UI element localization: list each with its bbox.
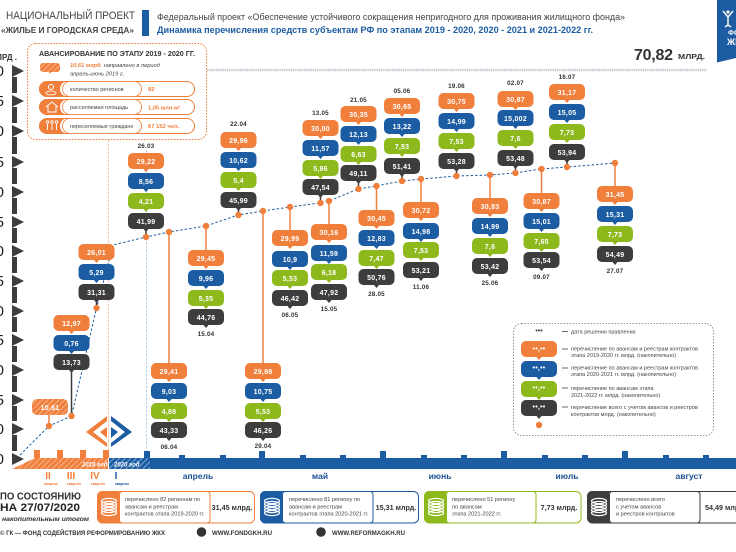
callout: 06.05: 5,53 bbox=[283, 276, 297, 283]
callout: 11.06: 11.06 bbox=[413, 284, 429, 291]
panel: advance callout: апрель-июнь 2019 г. bbox=[70, 72, 124, 78]
callout: 06.05: 06.05 bbox=[282, 312, 299, 319]
trend line bbox=[20, 163, 615, 455]
callout: 22.04: 29,96 bbox=[229, 138, 248, 145]
callout: 19.06 bbox=[438, 83, 474, 179]
legend: дата решения правления bbox=[571, 330, 636, 336]
callout: 27.07: 54,49 bbox=[606, 252, 624, 259]
callout: 25.06: 7,6 bbox=[485, 244, 495, 251]
callout: 12,97: 12,97 bbox=[62, 321, 81, 328]
card: stage 2021-2022 bbox=[424, 491, 581, 523]
callout: 29.04: 5,53 bbox=[256, 409, 270, 416]
legend: ••,•• bbox=[532, 346, 546, 353]
callout: 16.07 bbox=[549, 74, 585, 170]
footer: © ГК — ФОНД СОДЕЙСТВИЯ РЕФОРМИРОВАНИЮ ЖКХ bbox=[0, 529, 165, 537]
callout: 22.04: 22.04 bbox=[230, 121, 247, 128]
callout: 26.03 bbox=[128, 143, 164, 240]
legend: 2021-2022 гг. млрд. (накопительно) bbox=[571, 393, 660, 399]
status date block: накопительным итогом bbox=[2, 516, 89, 523]
callout: 09.07: 15,01 bbox=[532, 219, 551, 226]
callout: 21.05: 6,63 bbox=[351, 152, 366, 159]
quarter labels: I bbox=[115, 471, 118, 482]
quarter labels: квартал bbox=[67, 482, 82, 486]
callout: 02.07: 7,6 bbox=[510, 136, 521, 143]
callout: 06.04: 9,03 bbox=[162, 389, 176, 396]
month labels bbox=[183, 471, 702, 481]
month labels: июль bbox=[556, 471, 578, 481]
callout: 28.05 bbox=[358, 183, 394, 298]
card: stage 2019-2020: контрактов этапа 2019-2020 гг. bbox=[125, 512, 205, 518]
callout: 06.05: 10,9 bbox=[283, 257, 297, 264]
card: stage 2019-2020 bbox=[97, 491, 254, 523]
callout: 19.06: 7,53 bbox=[449, 139, 464, 146]
callout: 09.07: 53,54 bbox=[532, 258, 551, 265]
legend: этапа 2020-2021 гг. млрд. (накопительно) bbox=[571, 372, 676, 378]
callout: 26,01: 31,31 bbox=[87, 290, 106, 297]
callout: 15.05: 6,18 bbox=[322, 270, 336, 277]
status date block: ПО СОСТОЯНИЮ bbox=[0, 490, 81, 502]
callout: 16.07: 16.07 bbox=[559, 74, 576, 81]
legend: ••,•• bbox=[532, 365, 546, 372]
callout: 28.05: 28.05 bbox=[368, 291, 385, 298]
callout: 06.04: 06.04 bbox=[161, 444, 178, 451]
callout: 26.03: 29,22 bbox=[137, 159, 155, 166]
card: stage 2020-2021: 15,31 млрд. bbox=[376, 503, 416, 512]
callout: 22.04: 5,4 bbox=[233, 178, 244, 185]
card: stage 2019-2020: авансам и реестрам bbox=[125, 504, 178, 510]
quarter labels: квартал bbox=[115, 482, 130, 486]
callout: 28.05: 30,45 bbox=[367, 216, 386, 223]
callout: 25.06: 53,42 bbox=[481, 264, 499, 271]
callout: 02.07 bbox=[498, 80, 534, 176]
callout: 15.04 bbox=[188, 223, 224, 338]
callout: 02.07: 15,002 bbox=[504, 116, 527, 123]
callout: 12,97: 0,76 bbox=[64, 341, 79, 348]
heading: federal project: Федеральный проект «Обеспечение устойчивого сокращения непригодного для проживания жилищного фонда» bbox=[157, 12, 625, 22]
callout: 15.04: 15.04 bbox=[198, 331, 215, 338]
callout: 11.06: 7,53 bbox=[414, 248, 428, 255]
callout: 06.04: 4,89 bbox=[162, 409, 176, 416]
callout: 26.03: 41,99 bbox=[137, 219, 155, 226]
quarter labels: квартал bbox=[91, 482, 106, 486]
footer bbox=[0, 527, 405, 537]
callout: 05.06 bbox=[384, 88, 420, 184]
title: national project: НАЦИОНАЛЬНЫЙ ПРОЕКТ bbox=[6, 9, 135, 22]
callout: 11.06 bbox=[403, 176, 439, 291]
callout: 29.04: 10,75 bbox=[254, 389, 272, 396]
header accent bar bbox=[142, 10, 149, 36]
logo: chevrons bbox=[86, 416, 132, 447]
callout: 05.06: 30,65 bbox=[393, 104, 411, 111]
card: stage 2019-2020: 31,45 млрд. bbox=[212, 503, 252, 512]
callout: 19.06: 30,75 bbox=[447, 99, 466, 106]
callout: 26.03: 4,21 bbox=[139, 199, 153, 206]
row: regions bbox=[39, 81, 194, 97]
total amount: 70,82 bbox=[634, 47, 673, 64]
callout: 26,01 bbox=[78, 244, 114, 311]
callout: 06.04: 43,33 bbox=[160, 428, 178, 435]
legend: перечисление по авансам и реестрам контрактов bbox=[571, 346, 698, 352]
card: stage 2021-2022: 7,73 млрд. bbox=[541, 503, 577, 512]
panel: advance callout bbox=[28, 44, 206, 140]
legend: этапа 2019-2020 гг. млрд. (накопительно) bbox=[571, 353, 676, 359]
callout: 25.06: 25.06 bbox=[482, 280, 499, 287]
callout: 29.04 bbox=[245, 208, 281, 450]
callout: 02.07: 30,87 bbox=[506, 97, 525, 104]
card: stage 2020-2021: перечислено 81 региону по bbox=[289, 497, 360, 503]
card: total: с учетом авансов bbox=[616, 504, 661, 510]
quarter labels: III bbox=[67, 471, 75, 482]
callout: 26,01: 5,29 bbox=[89, 270, 104, 277]
row: regions: 82 bbox=[148, 87, 154, 93]
quarter labels: II bbox=[45, 471, 51, 482]
callout: 13.05: 11,57 bbox=[311, 146, 330, 153]
callout: 26.03: 8,56 bbox=[139, 179, 153, 186]
callout: 15.04: 29,45 bbox=[197, 256, 215, 263]
callout: 05.06: 7,53 bbox=[395, 144, 409, 151]
callout: 13.05 bbox=[302, 110, 338, 206]
callout: 15.04: 44,76 bbox=[197, 315, 215, 322]
total amount bbox=[634, 47, 705, 64]
quarter labels bbox=[44, 471, 130, 486]
row: regions: количество регионов bbox=[70, 87, 124, 93]
callout: 25.06 bbox=[472, 172, 508, 287]
callout: 27.07: 27.07 bbox=[607, 268, 624, 275]
month labels: август bbox=[676, 471, 702, 481]
callout: 06.04 bbox=[151, 229, 187, 451]
title: national project bbox=[1, 9, 135, 35]
callout: 05.06: 13,22 bbox=[393, 124, 411, 131]
callout: 29.04: 46,26 bbox=[254, 428, 272, 435]
legend: ••,•• bbox=[532, 404, 546, 411]
card: total: и реестров контрактов bbox=[616, 512, 675, 518]
callout: 26.03: 26.03 bbox=[138, 143, 155, 150]
callout: 10,61 bbox=[32, 399, 68, 429]
card: stage 2020-2021 bbox=[260, 491, 418, 523]
callout: 25.06: 30,83 bbox=[481, 204, 499, 211]
callout: 21.05: 49,11 bbox=[349, 171, 368, 178]
callout: 28.05: 12,83 bbox=[367, 236, 386, 243]
status date block: НА 27/07/2020 bbox=[0, 502, 80, 514]
callout: 19.06: 14,99 bbox=[447, 119, 466, 126]
callout: 06.04: 29,41 bbox=[160, 369, 178, 376]
month labels: июнь bbox=[429, 471, 451, 481]
callout: 15.05: 47,92 bbox=[320, 290, 338, 297]
callout: 09.07: 09.07 bbox=[533, 274, 550, 281]
card: stage 2021-2022: этапа 2021-2022 гг. bbox=[452, 512, 502, 518]
callout: 05.06: 51,41 bbox=[393, 164, 411, 171]
heading: chart subtitle: Динамика перечисления средств субъектам РФ по этапам 2019 - 2020, 2020 - 2021 и 2021-2022 гг. bbox=[157, 25, 593, 36]
legend bbox=[514, 324, 714, 436]
callout: 19.06: 53,28 bbox=[447, 159, 466, 166]
footer: WWW.REFORMAGKH.RU bbox=[332, 530, 405, 537]
callout: 21.05: 12,13 bbox=[349, 132, 368, 139]
card: stage 2020-2021: авансам и реестрам bbox=[289, 504, 342, 510]
title: national project: «ЖИЛЬЕ И ГОРОДСКАЯ СРЕДА» bbox=[1, 25, 134, 35]
callout: 05.06: 05.06 bbox=[394, 88, 411, 95]
card: total: перечислено всего bbox=[616, 497, 665, 503]
footer: WWW.FONDGKH.RU bbox=[212, 530, 272, 537]
callout: 22.04 bbox=[220, 121, 256, 218]
month labels: апрель bbox=[183, 471, 213, 481]
row: area bbox=[39, 99, 194, 115]
callout: 28.05: 50,76 bbox=[367, 275, 386, 282]
callout: 15.04: 9,96 bbox=[199, 276, 213, 283]
logo: fund badge bbox=[717, 0, 736, 62]
callout: 27.07: 31,45 bbox=[606, 192, 624, 199]
callout: 21.05: 30,35 bbox=[349, 112, 368, 119]
callout: 19.06: 19.06 bbox=[448, 83, 465, 90]
month labels: май bbox=[312, 471, 328, 481]
row: area: 1,05 млн.м² bbox=[148, 104, 180, 112]
callout: 27.07 bbox=[597, 160, 633, 275]
callout: 27.07: 7,73 bbox=[608, 232, 622, 239]
callout: 13.05: 13.05 bbox=[312, 110, 329, 117]
callout: 06.05: 29,99 bbox=[281, 236, 299, 243]
quarter labels: IV bbox=[90, 471, 100, 482]
total amount: МЛРД. bbox=[678, 52, 705, 61]
timeline bar bbox=[12, 450, 736, 469]
callout: 26,01: 26,01 bbox=[87, 250, 106, 257]
callout: 13.05: 5,96 bbox=[313, 166, 328, 173]
legend: ••,•• bbox=[532, 385, 546, 392]
panel: advance callout: АВАНСИРОВАНИЕ ПО ЭТАПУ 2019 - 2020 ГГ. bbox=[39, 49, 195, 58]
callout: 06.05: 46,42 bbox=[281, 296, 299, 303]
callout: 13.05: 30,00 bbox=[311, 126, 330, 133]
row: residents: переселяемые граждане bbox=[70, 124, 134, 130]
callout: 11.06: 14,98 bbox=[412, 229, 430, 236]
callout: 12,97: 13,73 bbox=[62, 360, 81, 367]
callout: 27.07: 15,31 bbox=[606, 212, 624, 219]
card: stage 2021-2022: по авансам bbox=[452, 504, 482, 510]
callout: 21.05 bbox=[340, 97, 376, 192]
callout: 29.04: 29,98 bbox=[254, 369, 272, 376]
legend: перечисление по авансам этапа bbox=[571, 386, 655, 392]
callout: 29.04: 29.04 bbox=[255, 443, 272, 450]
status date block bbox=[0, 490, 89, 523]
callout: 22.04: 45,99 bbox=[229, 198, 248, 205]
timeline bar: 2019 год bbox=[81, 462, 108, 468]
row: residents bbox=[39, 118, 194, 134]
callout: 09.07 bbox=[524, 166, 560, 281]
callout: 15.05 bbox=[311, 198, 347, 313]
legend: перечисление по авансам и реестрам контрактов bbox=[571, 366, 698, 372]
callout: 22.04: 10,62 bbox=[229, 158, 248, 165]
callout: 09.07: 7,65 bbox=[534, 239, 549, 246]
callout: 15.05: 15.05 bbox=[321, 306, 338, 313]
callout: 13.05: 47,54 bbox=[311, 185, 330, 192]
callout: 12,97 bbox=[54, 315, 90, 419]
callout: 11.06: 53,21 bbox=[412, 268, 430, 275]
card: stage 2020-2021: контрактов этапа 2020-2021 гг. bbox=[289, 512, 369, 518]
legend: ••• bbox=[535, 328, 543, 335]
callout: 28.05: 7,47 bbox=[369, 256, 384, 263]
callout: 15.04: 5,35 bbox=[199, 296, 213, 303]
callout: 16.07: 31,17 bbox=[558, 90, 576, 97]
callout: 10,61: 10,61 bbox=[41, 405, 59, 412]
callout: 25.06: 14,99 bbox=[481, 224, 499, 231]
legend: перечисление всего с учетом авансов и реестров bbox=[571, 405, 698, 411]
quarter labels: квартал bbox=[44, 482, 59, 486]
row: residents: 67 152 чел. bbox=[148, 124, 180, 130]
callout: 16.07: 53,94 bbox=[558, 150, 576, 157]
callout: 09.07: 30,87 bbox=[532, 199, 551, 206]
callout: 02.07: 02.07 bbox=[507, 80, 524, 87]
callout: 11.06: 30,72 bbox=[412, 208, 430, 215]
card: stage 2021-2022: перечислено 51 региону bbox=[452, 497, 516, 503]
card: stage 2019-2020: перечислено 82 регионам по bbox=[125, 497, 200, 503]
callout: 15.05: 11,59 bbox=[320, 251, 338, 258]
callout: 06.05 bbox=[272, 204, 308, 319]
timeline bar: 2020 год bbox=[113, 462, 140, 468]
legend: контрактов млрд. (накопительно) bbox=[571, 412, 656, 418]
panel: advance callout: 10,61 млрд. направлено в период bbox=[70, 63, 160, 69]
card: total bbox=[587, 491, 736, 523]
callout: 02.07: 53,48 bbox=[506, 156, 525, 163]
callout: 16.07: 15,05 bbox=[558, 110, 576, 117]
callout: 21.05: 21.05 bbox=[350, 97, 367, 104]
callout: 15.05: 30,16 bbox=[320, 230, 338, 237]
row: area: расселяемая площадь bbox=[70, 105, 128, 111]
y axis bbox=[0, 53, 24, 468]
callout: 16.07: 7,73 bbox=[560, 130, 574, 137]
